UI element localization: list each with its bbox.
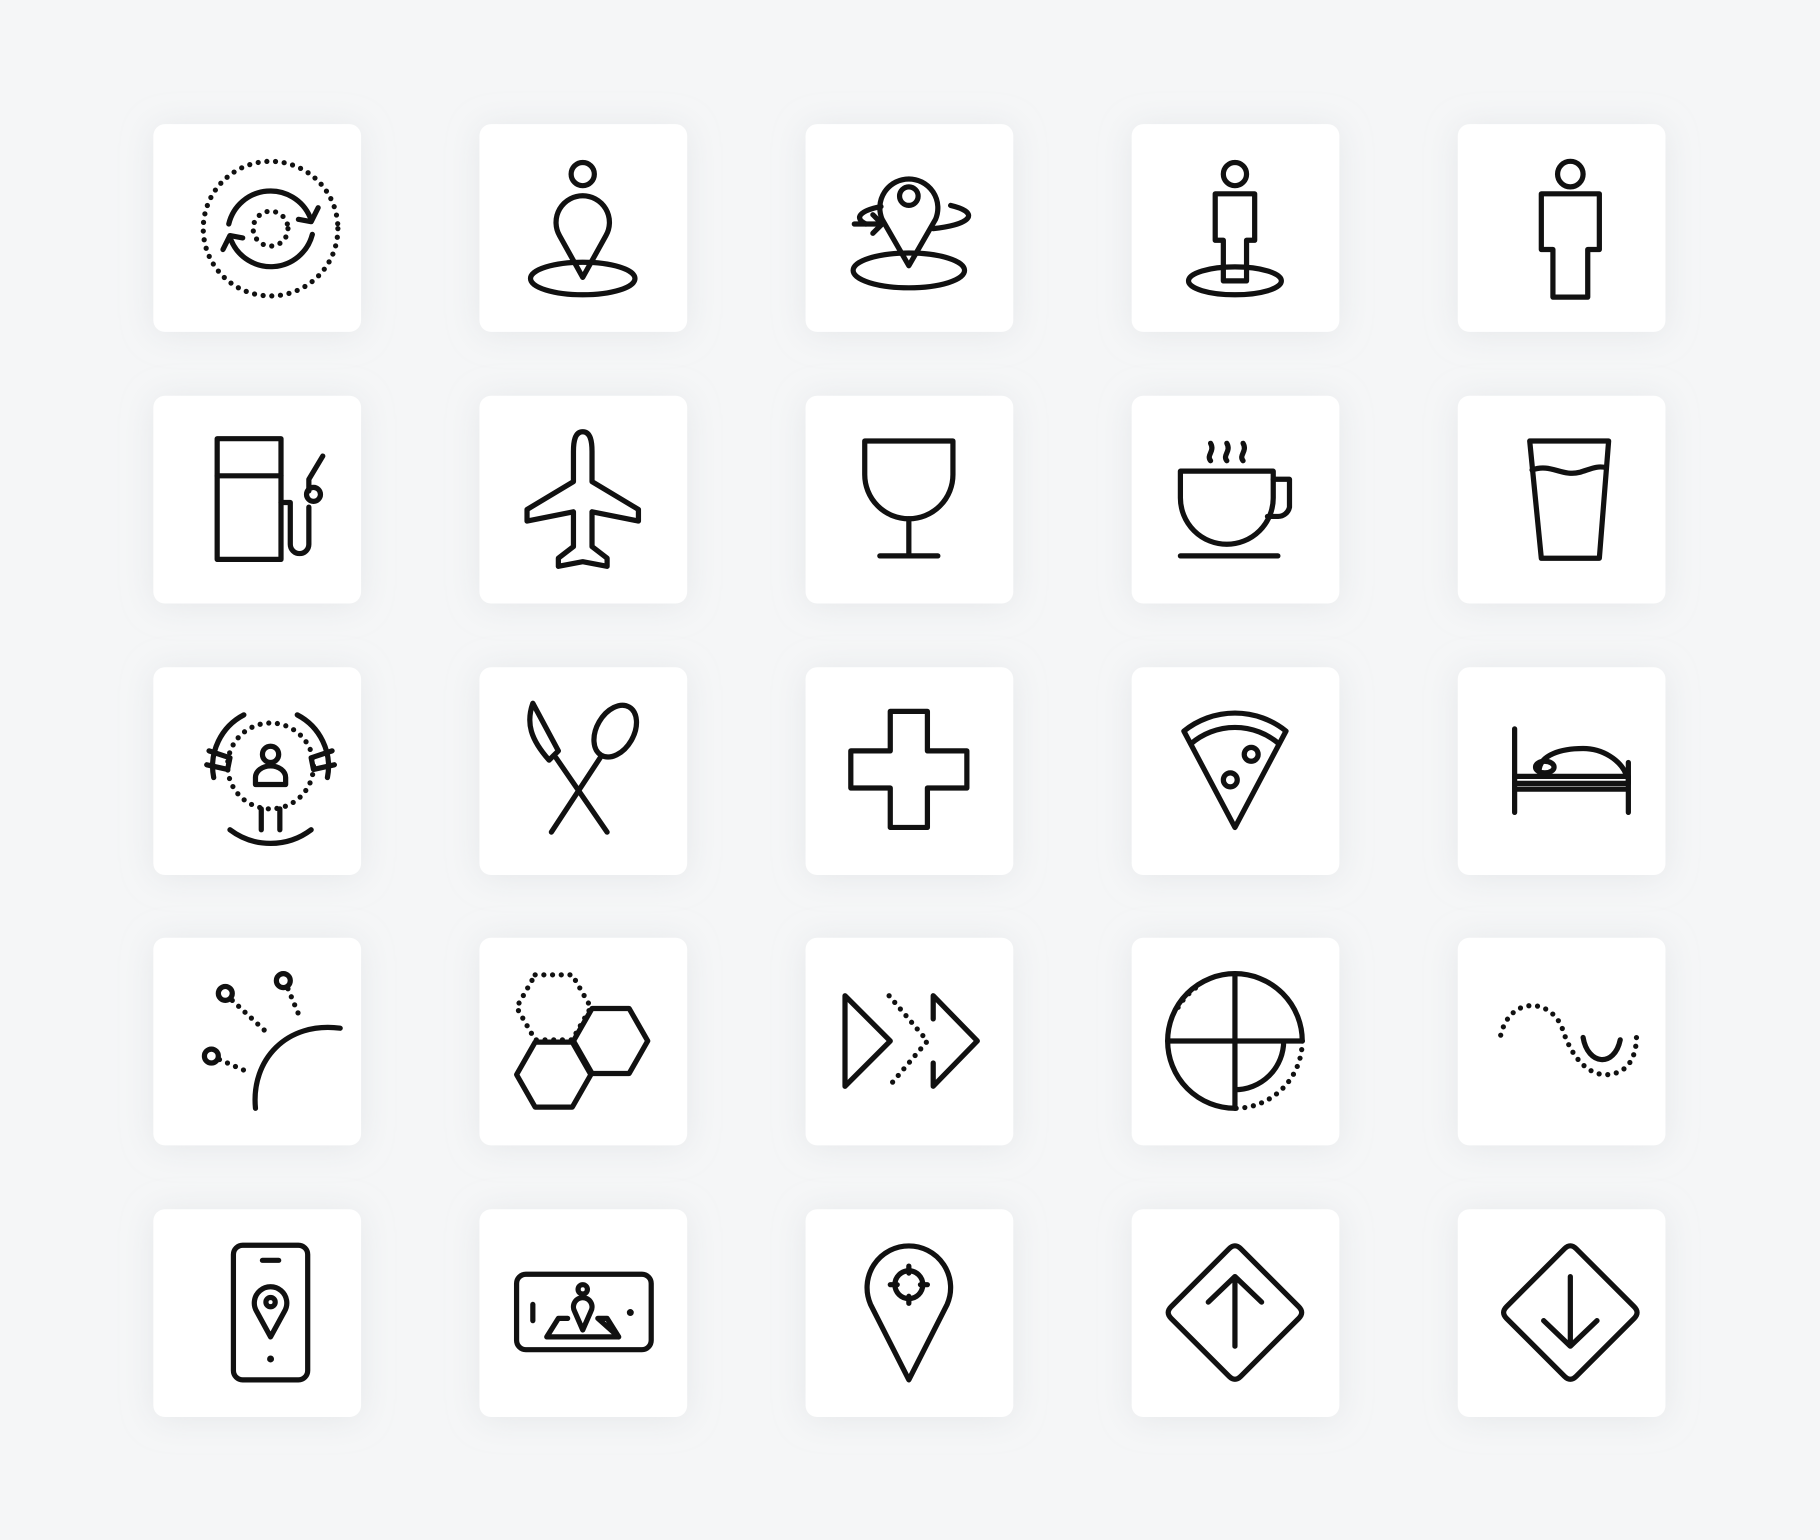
icon: water glass — [1530, 441, 1609, 558]
card: location orbit — [806, 124, 1013, 332]
card: cross — [806, 667, 1013, 875]
card: diamond up — [1132, 1209, 1339, 1417]
icon: pizza slice — [1184, 713, 1286, 827]
card: wine glass — [806, 396, 1013, 603]
card: bed — [1458, 667, 1665, 875]
icon: sync — [203, 161, 338, 296]
icon: arc with nodes — [204, 974, 340, 1108]
card: fast forward — [806, 938, 1013, 1145]
icon: bed — [1515, 729, 1628, 812]
icon: person — [1541, 161, 1599, 297]
icon: person on spot — [1189, 162, 1281, 295]
icon: map screen — [517, 1274, 651, 1350]
icon: location orbit — [853, 179, 969, 288]
card: plane — [479, 396, 687, 603]
card: sync — [153, 124, 361, 332]
card: phone location — [153, 1209, 361, 1417]
card: wave — [1458, 938, 1665, 1145]
card: person on spot — [1132, 124, 1339, 332]
icon: coffee cup — [1180, 443, 1289, 556]
card: steering — [153, 667, 361, 875]
icon: diamond arrow down — [1504, 1246, 1637, 1379]
card: fuel — [153, 396, 361, 603]
card: pizza — [1132, 667, 1339, 875]
icon: wine glass — [865, 441, 953, 556]
card: person pin — [479, 124, 687, 332]
card: coffee — [1132, 396, 1339, 603]
icon: hexagons — [517, 975, 648, 1107]
card: person — [1458, 124, 1665, 332]
card: map — [479, 1209, 687, 1417]
icon: medical cross — [851, 711, 967, 827]
card: water glass — [1458, 396, 1665, 603]
icon: wave — [1501, 1006, 1636, 1075]
icon: knife and spoon — [530, 698, 645, 832]
icon: fast forward — [845, 996, 977, 1086]
icon: fuel pump — [217, 439, 323, 559]
icon: person pin — [531, 162, 635, 295]
card: knife spoon — [479, 667, 687, 875]
icon: phone location — [233, 1245, 308, 1380]
icon: target pin — [867, 1246, 951, 1380]
icon: quartered circle — [1168, 974, 1302, 1108]
card: hexagons — [479, 938, 687, 1145]
icon: diamond arrow up — [1168, 1246, 1302, 1379]
card: arc nodes — [153, 938, 361, 1145]
card: diamond down — [1458, 1209, 1665, 1417]
icon: plane — [527, 432, 638, 566]
icon: steering wheel driver — [207, 715, 334, 843]
card: quartered circle — [1132, 938, 1339, 1145]
card: target pin — [806, 1209, 1013, 1417]
